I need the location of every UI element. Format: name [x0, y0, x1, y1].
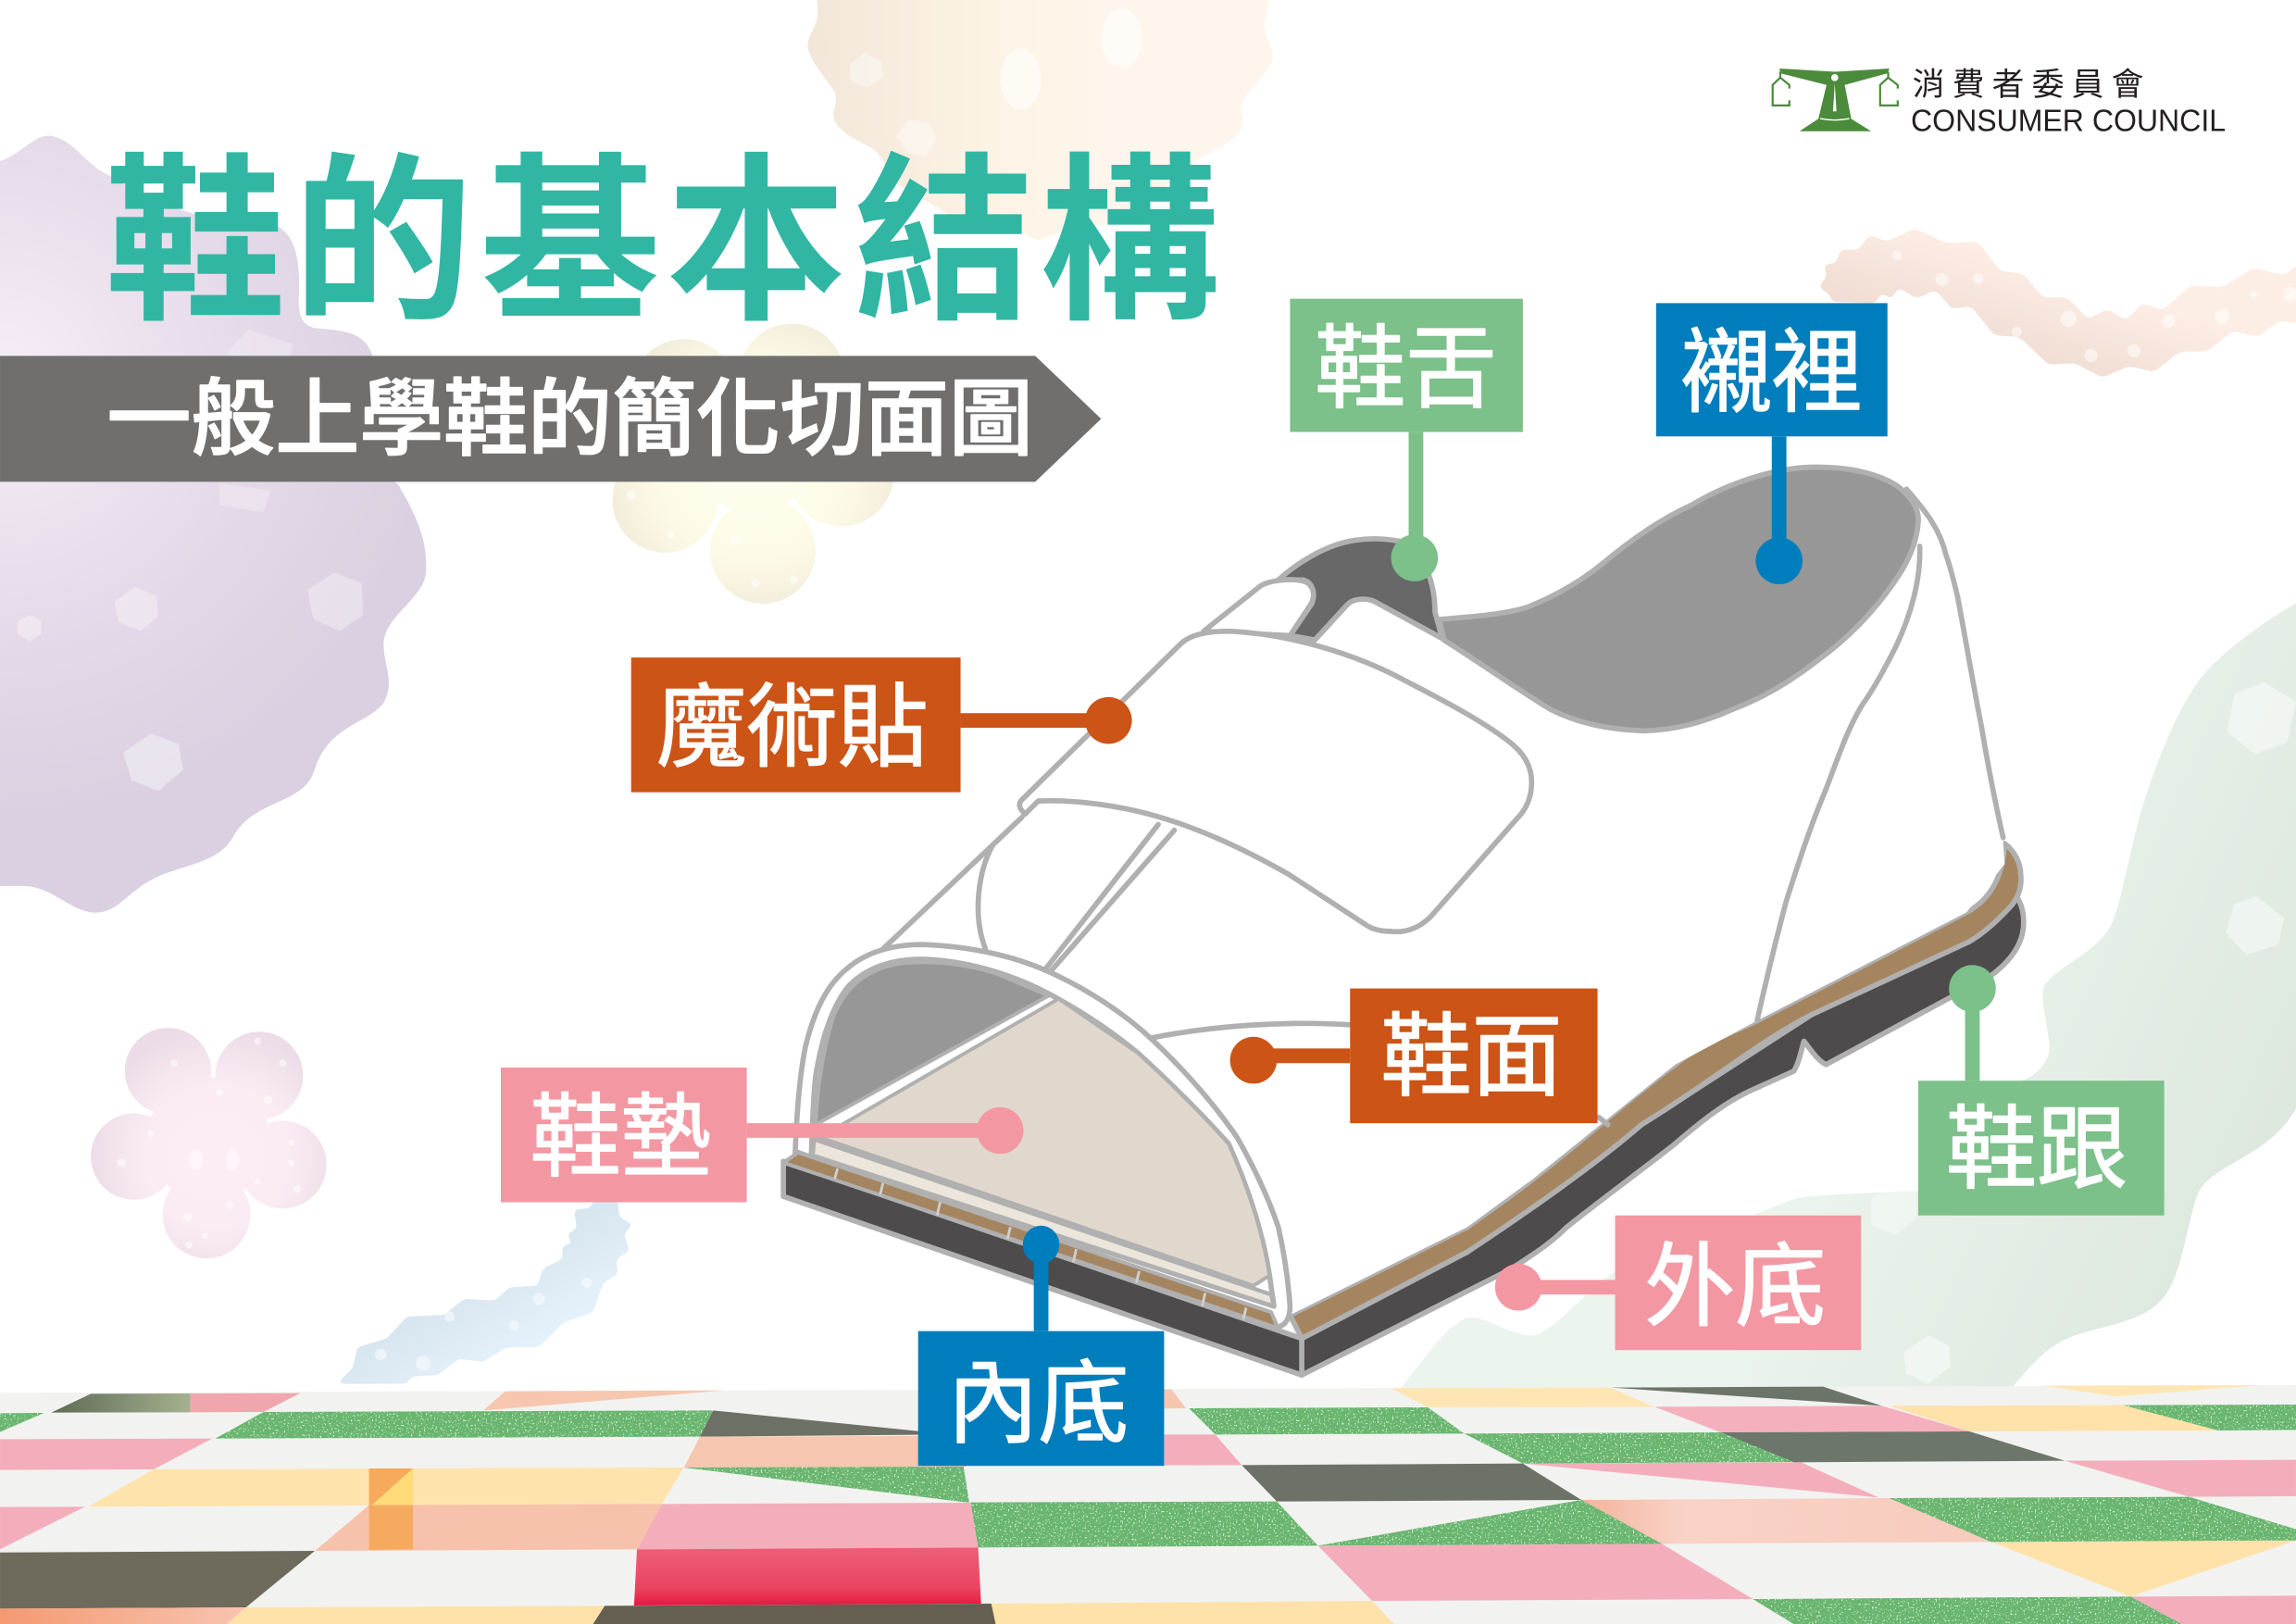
- strap loop: [1204, 580, 1314, 635]
- cut-away outer shell: [795, 944, 1290, 1327]
- logo: Consumer Council: [1773, 67, 2226, 138]
- outsole: [783, 896, 2024, 1375]
- label: lining: 襯裡: [1681, 322, 1863, 424]
- label: outsole: [1495, 1216, 1861, 1350]
- subtitle text: 一般上學鞋的簡化切面圖: [106, 373, 1033, 467]
- insole: [817, 999, 1269, 1286]
- background blob: purple: [0, 135, 426, 913]
- label: lining: [1656, 303, 1888, 584]
- floor: checkered tiles: [0, 1385, 2296, 1624]
- label: midsole: 內底: [947, 1353, 1129, 1455]
- logo icon: scales: [1773, 69, 1898, 131]
- tongue: [1279, 539, 1442, 640]
- midsole: [1290, 843, 2021, 1339]
- shoe outline lines: [881, 489, 2003, 1125]
- band stitches: [835, 1168, 1246, 1319]
- collar lining: [1440, 468, 1918, 731]
- title: 鞋的基本結構: [106, 143, 1219, 344]
- label: tongue: 鞋舌: [1315, 318, 1496, 419]
- label: tongue: [1290, 299, 1523, 581]
- label: insole: [501, 1068, 1024, 1202]
- velcro strap: [1019, 631, 1531, 931]
- subtitle banner: [0, 356, 1101, 481]
- shoe cross-section illustration: [783, 468, 2024, 1375]
- lining front grey: [816, 962, 1048, 1125]
- background blob: beige: [805, 0, 1276, 242]
- background wave: blue: [337, 1201, 632, 1384]
- cut-away inner line: [811, 959, 1274, 1306]
- label: heel: 鞋跟: [1946, 1098, 2128, 1200]
- label: upper: [1230, 989, 1598, 1123]
- background wave: peach: [1817, 229, 2296, 378]
- shoe upper body: [881, 468, 2004, 1315]
- sole front band: [783, 1153, 1279, 1329]
- label: outsole: 外底: [1644, 1235, 1826, 1337]
- background flower: pink: [91, 1028, 327, 1258]
- background blob: green: [1398, 586, 2296, 1392]
- front edge line: [1300, 1339, 1304, 1375]
- label: upper: 鞋面: [1380, 1006, 1563, 1107]
- background flower: yellow: [612, 324, 893, 604]
- label: midsole: [918, 1226, 1164, 1466]
- label: insole: 鞋墊: [530, 1086, 712, 1188]
- label: heel: [1918, 965, 2165, 1216]
- insole front edge: [813, 1139, 1274, 1306]
- label: velcro: 魔術貼: [656, 676, 929, 778]
- label: velcro: [631, 657, 1132, 793]
- logo text: Chinese: 消費者委員會: [1913, 67, 2152, 103]
- logo text: English: CONSUMER COUNCIL: [1911, 104, 2226, 138]
